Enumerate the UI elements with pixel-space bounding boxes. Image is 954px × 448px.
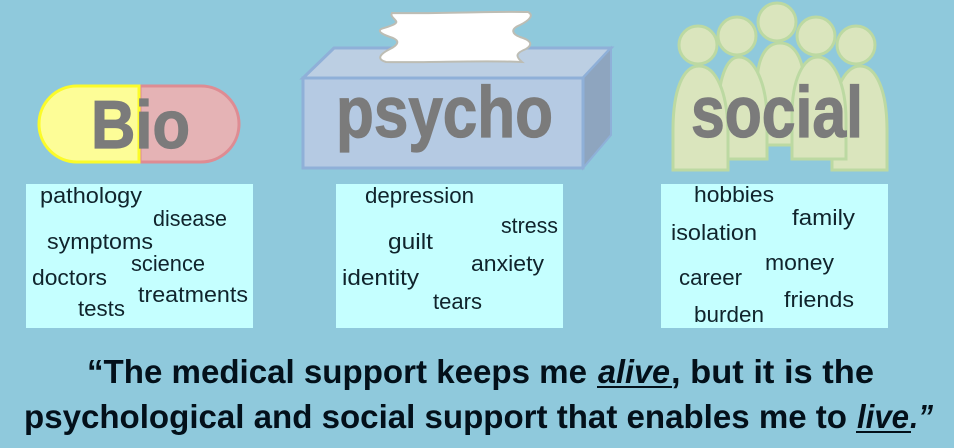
panel: social keywords: isolation bbox=[671, 220, 757, 245]
icon: pill with Bio heading bbox=[39, 86, 239, 163]
quote: “The medical support keeps me bbox=[87, 353, 587, 390]
panel: psycho keywords: tears bbox=[433, 289, 482, 314]
panel: social keywords: money bbox=[765, 250, 834, 275]
panel: bio keywords: science bbox=[131, 251, 205, 276]
panel: bio keywords: tests bbox=[78, 296, 125, 321]
panel: bio keywords: symptoms bbox=[47, 229, 153, 254]
panel: bio keywords: treatments bbox=[138, 282, 248, 307]
panel: psycho keywords bbox=[336, 183, 563, 328]
quote: , but it is the bbox=[671, 353, 874, 390]
icon: group of people with social heading bbox=[673, 3, 887, 170]
panel: social keywords: family bbox=[792, 205, 855, 230]
panel: social keywords: hobbies bbox=[694, 182, 774, 207]
quote: alive bbox=[598, 353, 670, 390]
panel: bio keywords: pathology bbox=[40, 183, 142, 208]
panel: psycho keywords: stress bbox=[501, 213, 558, 238]
quote: .” bbox=[910, 398, 933, 435]
icon: group of people with social heading: social bbox=[691, 73, 863, 153]
icon: tissue box with psycho heading bbox=[303, 12, 611, 168]
panel: social keywords bbox=[661, 182, 888, 328]
panel: psycho keywords: guilt bbox=[388, 229, 433, 254]
panel: psycho keywords: identity bbox=[342, 265, 419, 290]
panel: bio keywords: doctors bbox=[32, 265, 107, 290]
panel: social keywords: friends bbox=[784, 287, 854, 312]
icon: tissue box with psycho heading: psycho bbox=[336, 73, 553, 153]
quote bbox=[24, 353, 933, 435]
icon: pill with Bio heading: Bio bbox=[91, 87, 190, 163]
panel: psycho keywords: depression bbox=[365, 183, 474, 208]
panel: bio keywords bbox=[26, 183, 253, 328]
quote: live bbox=[857, 398, 909, 435]
panel: psycho keywords: anxiety bbox=[471, 251, 544, 276]
panel: social keywords: burden bbox=[694, 302, 764, 327]
quote: psychological and social support that enables me to bbox=[24, 398, 847, 435]
panel: social keywords: career bbox=[679, 265, 742, 290]
panel: bio keywords: disease bbox=[153, 206, 227, 231]
